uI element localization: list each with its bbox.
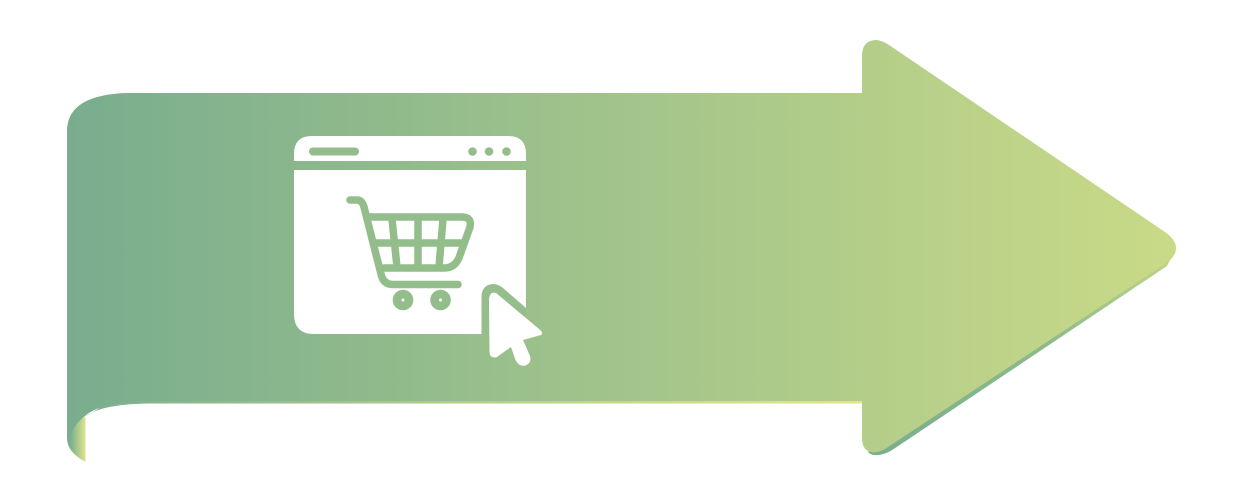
arrow head underside shadow	[868, 256, 1172, 455]
mouse cursor	[482, 284, 542, 366]
address bar and window dots	[309, 147, 511, 156]
cart wheels	[393, 290, 451, 310]
icon: browser window with shopping cart and cursor	[294, 136, 542, 366]
browser page	[294, 170, 526, 334]
ribbon fold at lower left	[67, 400, 86, 462]
shopping cart	[350, 200, 470, 284]
browser title bar	[294, 136, 526, 161]
body underside strip	[85, 395, 862, 417]
arrow body	[67, 40, 1176, 452]
